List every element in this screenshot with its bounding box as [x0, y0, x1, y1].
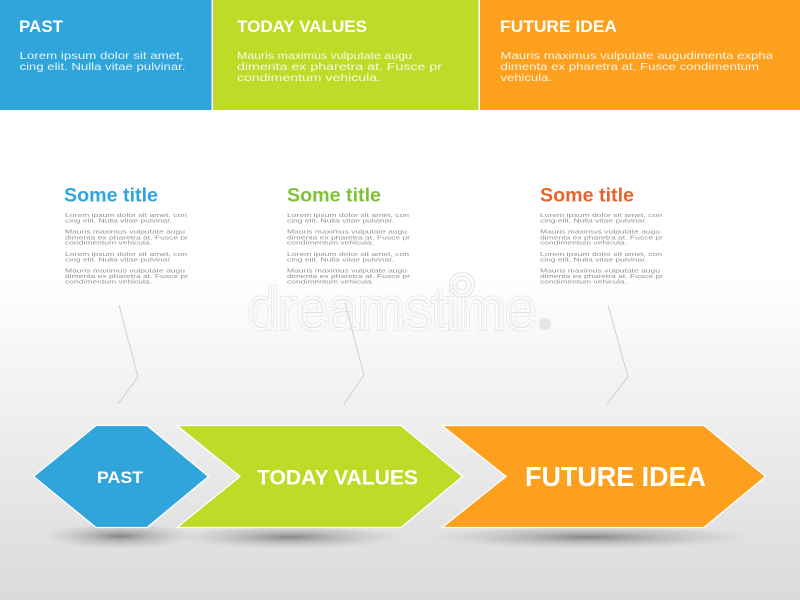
label: today values: TODAY VALUES — [257, 466, 418, 490]
arrow: past — [34, 426, 208, 528]
panel: today values header — [213, 0, 478, 110]
heading: some title blue: Some title — [64, 184, 158, 206]
text block: past description: Lorem ipsum dolor sit amet, — [20, 50, 184, 62]
text block: future idea description: vehicula. — [500, 72, 552, 84]
text block: today values paragraphs: cing elit. Nulla vitae pulvinar. — [287, 258, 395, 264]
column: future idea details — [540, 184, 663, 286]
text block: future idea description: dimenta ex pharetra at. Fusce condimentum — [500, 61, 759, 73]
text block: future idea paragraphs: Mauris maximus vulputate augu — [540, 230, 660, 236]
text block: today values paragraphs: condimentum vehicula. — [287, 280, 375, 286]
heading: some title orange: Some title — [540, 184, 634, 206]
label: future idea: FUTURE IDEA — [525, 461, 706, 492]
text block: past paragraphs: cing elit. Nulla vitae pulvinar. — [65, 258, 173, 264]
heading: today values: TODAY VALUES — [237, 18, 367, 36]
text block: future idea description — [500, 50, 773, 84]
text block: today values paragraphs: dimenta ex pharetra at. Fusce pr — [287, 274, 410, 280]
watermark: dreamstime — [248, 277, 536, 342]
text block: future idea paragraphs: Lorem ipsum dolor sit amet, con — [540, 252, 662, 258]
text block: today values description: condimentum vehicula. — [237, 72, 381, 84]
panel: future idea header — [480, 0, 800, 110]
text block: past description: cing elit. Nulla vitae pulvinar. — [20, 61, 186, 73]
text block: past paragraphs: dimenta ex pharetra at. Fusce pr — [65, 274, 188, 280]
text block: future idea description: Mauris maximus vulputate augudimenta expha — [500, 50, 773, 62]
text block: today values description: Mauris maximus vulputate augu — [237, 50, 412, 62]
panel: past header — [0, 0, 212, 110]
text block: today values description: dimenta ex pharetra at. Fusce pr — [237, 61, 443, 73]
text block: future idea paragraphs: condimentum vehicula. — [540, 241, 628, 247]
text block: future idea paragraphs: cing elit. Nulla vitae pulvinar. — [540, 258, 648, 264]
text block: past paragraphs: Lorem ipsum dolor sit amet, con — [65, 252, 187, 258]
text block: future idea paragraphs: dimenta ex pharetra at. Fusce pr — [540, 274, 663, 280]
text block: today values paragraphs — [287, 213, 410, 286]
text block: future idea paragraphs: Mauris maximus vulputate augu — [540, 269, 660, 275]
text block: today values paragraphs: Mauris maximus vulputate augu — [287, 230, 407, 236]
connector: future idea — [607, 305, 628, 404]
connector: past — [118, 305, 138, 404]
text block: future idea paragraphs: cing elit. Nulla vitae pulvinar. — [540, 219, 648, 225]
shadow: future idea — [430, 525, 750, 549]
watermark: dreamstime — [248, 277, 536, 342]
text block: today values description — [237, 50, 443, 84]
text block: past paragraphs: condimentum vehicula. — [65, 280, 153, 286]
text block: today values paragraphs: Lorem ipsum dolor sit amet, con — [287, 213, 409, 219]
heading: past: PAST — [19, 18, 63, 36]
text block: past paragraphs: condimentum vehicula. — [65, 241, 153, 247]
heading: some title green: Some title — [287, 184, 381, 206]
text block: past paragraphs: Mauris maximus vulputate augu — [65, 269, 185, 275]
text block: today values paragraphs: condimentum vehicula. — [287, 241, 375, 247]
text block: past paragraphs: Lorem ipsum dolor sit amet, con — [65, 213, 187, 219]
text block: past paragraphs: dimenta ex pharetra at. Fusce pr — [65, 235, 188, 241]
text block: future idea paragraphs: Lorem ipsum dolor sit amet, con — [540, 213, 662, 219]
arrow: today values — [177, 426, 462, 528]
text block: future idea paragraphs: dimenta ex pharetra at. Fusce pr — [540, 235, 663, 241]
text block: future idea paragraphs — [540, 213, 663, 286]
shadow: today values — [178, 525, 402, 549]
text block: past paragraphs: Mauris maximus vulputate augu — [65, 230, 185, 236]
column: past details — [64, 184, 188, 286]
text block: today values paragraphs: cing elit. Nulla vitae pulvinar. — [287, 219, 395, 225]
text block: today values paragraphs: dimenta ex pharetra at. Fusce pr — [287, 235, 410, 241]
text block: today values paragraphs: Lorem ipsum dolor sit amet, con — [287, 252, 409, 258]
text block: future idea paragraphs: condimentum vehicula. — [540, 280, 628, 286]
connector: today values — [344, 303, 364, 404]
text block: past paragraphs — [65, 213, 188, 286]
text block: past paragraphs: cing elit. Nulla vitae pulvinar. — [65, 219, 173, 225]
arrow: future idea — [442, 426, 766, 528]
column: today values details — [287, 184, 410, 286]
shadow: past — [44, 523, 196, 549]
heading: future idea: FUTURE IDEA — [500, 18, 617, 36]
text block: today values paragraphs: Mauris maximus vulputate augu — [287, 269, 407, 275]
label: past: PAST — [97, 468, 144, 487]
text block: past description — [20, 50, 186, 73]
